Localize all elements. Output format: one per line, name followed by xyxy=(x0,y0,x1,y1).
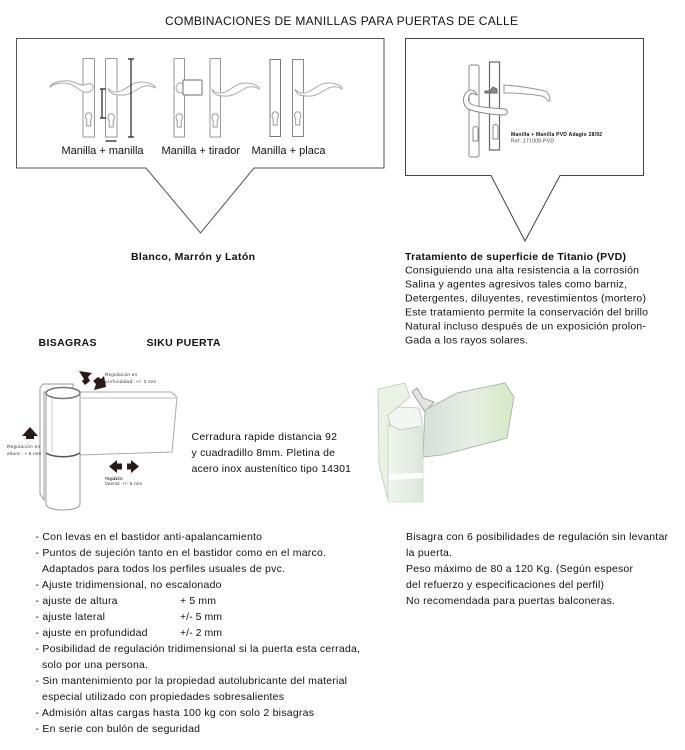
text block: lock description: y cuadradillo 8mm. Pletina de xyxy=(192,447,335,459)
list: hinge features: - Admisión altas cargas hasta 100 kg con solo 2 bisagras xyxy=(36,707,314,719)
text block: PVD treatment xyxy=(405,251,648,346)
list: hinge features: - Posibilidad de regulación tridimensional si la puerta esta cerrada, xyxy=(36,643,360,655)
label: manilla + tirador: Manilla + tirador xyxy=(162,145,240,157)
text block: hinge regulation notes: No recomendada para puertas balconeras. xyxy=(406,595,615,607)
title: COMBINACIONES DE MANILLAS PARA PUERTAS DE CALLE xyxy=(165,14,518,28)
label: regulation depth xyxy=(105,372,156,384)
text block: PVD treatment: Detergentes, diluyentes, revestimientos (mortero) xyxy=(405,292,646,304)
heading: siku puerta: SIKU PUERTA xyxy=(146,337,221,349)
panel: handle combinations callout xyxy=(16,38,384,233)
list: hinge features: +/- 2 mm xyxy=(180,627,222,639)
text block: PVD treatment: Tratamiento de superficie de Titanio (PVD) xyxy=(405,251,626,263)
label: regulation height: Regulación en xyxy=(7,444,40,449)
illustration: green hinge photo xyxy=(378,383,514,502)
text block: hinge regulation notes: la puerta. xyxy=(406,547,452,559)
list: hinge features: - Ajuste tridimensional, no escalonado xyxy=(36,579,222,591)
text block: PVD treatment: Gada a los rayos solares. xyxy=(405,334,528,346)
label: regulation lateral: lateral: +/- 5 mm xyxy=(105,481,142,486)
icon: arrows lateral xyxy=(109,460,139,473)
list: hinge features: - ajuste lateral xyxy=(36,611,105,623)
text block: PVD treatment: Consiguiendo una alta resistencia a la corrosión xyxy=(405,264,639,276)
list: hinge features: +/- 5 mm xyxy=(180,611,222,623)
list: hinge features: - Sin mantenimiento por la propiedad autolubricante del material xyxy=(36,675,347,687)
icon: manilla + placa xyxy=(270,60,342,136)
list: hinge features: - ajuste de altura xyxy=(36,595,118,607)
list: hinge features: solo por una persona. xyxy=(42,659,148,671)
text block: PVD treatment: Natural incluso después de un exposición prolon- xyxy=(405,320,646,332)
list: hinge features: - En serie con bulón de seguridad xyxy=(36,723,200,735)
text block: hinge regulation notes: Bisagra con 6 posibilidades de regulación sin levantar xyxy=(406,531,668,543)
heading: colours: Blanco, Marrón y Latón xyxy=(131,251,255,263)
label: manilla + placa: Manilla + placa xyxy=(252,145,326,157)
text block: lock description xyxy=(192,431,351,475)
label: regulation depth: Regulación en xyxy=(105,372,137,377)
list: hinge features xyxy=(36,531,360,735)
text block: lock description: acero inox austenítico tipo 14301 xyxy=(192,463,351,475)
heading: bisagras: BISAGRAS xyxy=(38,337,96,349)
list: hinge features: + 5 mm xyxy=(180,595,216,607)
label: regulation height xyxy=(7,444,41,456)
icon: manilla + manilla xyxy=(50,58,155,141)
caption: PVD handle: Ref. 171008-PVD xyxy=(511,138,554,144)
caption: PVD handle: Manilla + Manilla PVD Adagio 28/92 xyxy=(511,132,602,138)
icon: arrow up xyxy=(22,427,38,439)
label: regulation lateral: Regulación xyxy=(105,476,123,481)
icon: PVD handle xyxy=(464,62,550,157)
label: regulation height: altura : + 5 mm xyxy=(7,451,41,456)
text block: PVD treatment: Salina y agentes agresivos tales como barniz, xyxy=(405,278,627,290)
list: hinge features: Adaptados para todos los perfiles usuales de pvc. xyxy=(42,563,285,575)
text block: hinge regulation notes: del refuerzo y especificaciones del perfil) xyxy=(406,579,604,591)
list: hinge features: - Puntos de sujeción tanto en el bastidor como en el marco. xyxy=(36,547,326,559)
list: hinge features: - ajuste en profundidad xyxy=(36,627,148,639)
text block: lock description: Cerradura rapide distancia 92 xyxy=(192,431,337,443)
text block: hinge regulation notes: Peso máximo de 80 a 120 Kg. (Según espesor xyxy=(406,563,634,575)
list: hinge features: especial utilizado con propiedades sobresalientes xyxy=(42,691,284,703)
list: hinge features: - Con levas en el bastidor anti-apalancamiento xyxy=(36,531,262,543)
icon: manilla + tirador xyxy=(174,58,259,137)
label: regulation lateral xyxy=(105,476,142,486)
icon: arrows depth xyxy=(79,371,106,390)
text block: PVD treatment: Este tratamiento permite la conservación del brillo xyxy=(405,306,648,318)
diagram: hinge with regulation arrows xyxy=(7,371,177,510)
panel: PVD handle callout xyxy=(406,38,644,241)
label: manilla + manilla: Manilla + manilla xyxy=(62,145,144,157)
caption: PVD handle xyxy=(511,132,602,144)
text block: hinge regulation notes xyxy=(406,531,668,607)
label: regulation depth: profundidad: +/- 2 mm xyxy=(105,379,156,384)
